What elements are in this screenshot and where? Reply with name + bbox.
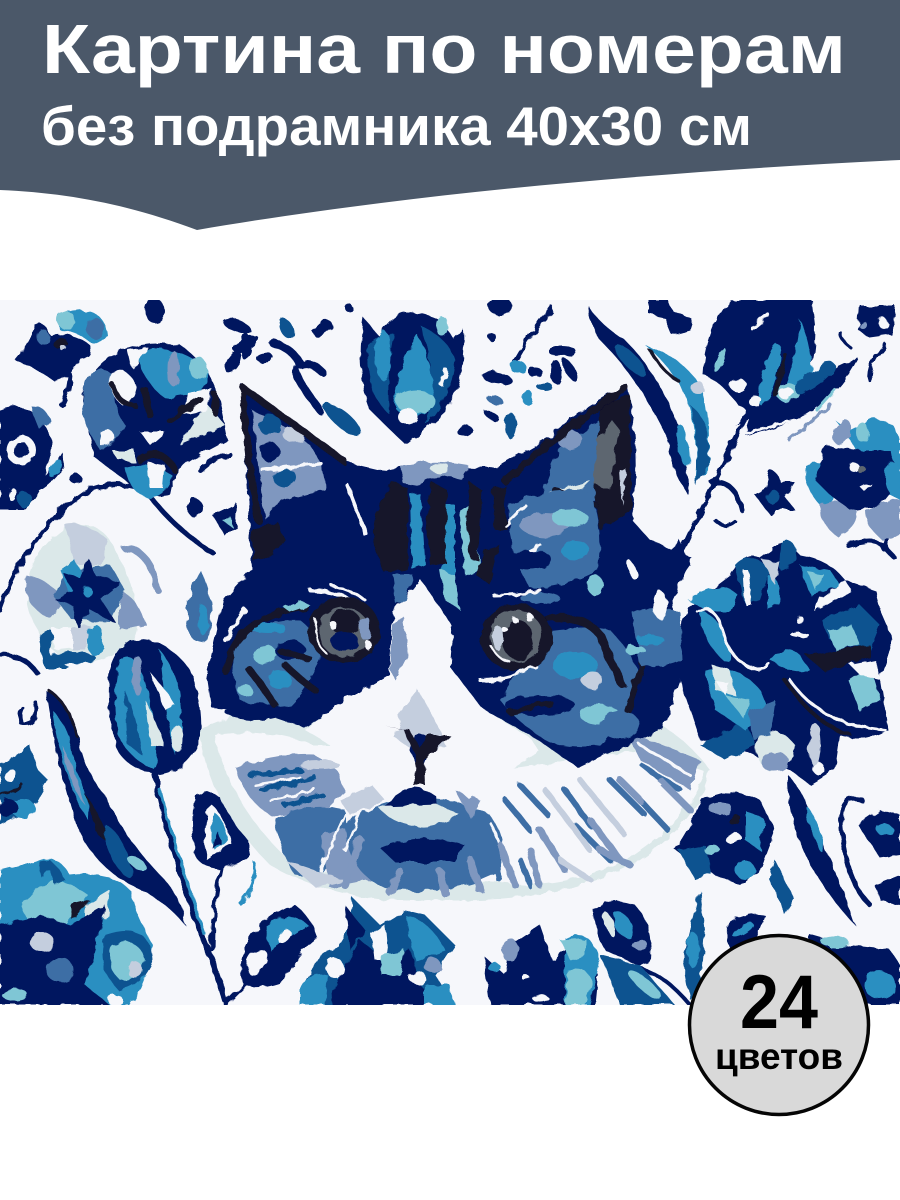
head navy [207, 384, 692, 768]
sprig: top right [345, 297, 580, 439]
badge label: цветов [715, 1036, 843, 1077]
tulip: bottom right [592, 901, 675, 1005]
marks: top right [650, 300, 895, 347]
head right ear [505, 388, 632, 530]
flower: far left ring [0, 405, 65, 510]
leaves: upper right [588, 305, 709, 495]
flower: top left small [15, 309, 107, 382]
small flower: right [755, 472, 795, 515]
tulip: upper right [703, 300, 858, 440]
header banner [0, 0, 900, 230]
tulip: top centre [361, 312, 464, 445]
sprig: top left [145, 299, 367, 442]
blaze shading [300, 615, 432, 769]
tulip bud [192, 792, 250, 868]
tulip: small lower [225, 905, 318, 1005]
nose [387, 693, 450, 785]
stems and thin lines [0, 345, 892, 1005]
flower: pale left [25, 524, 158, 668]
white blaze and muzzle [300, 580, 540, 800]
flower: far left partial [0, 745, 48, 825]
blob cluster: top of big flower [671, 538, 885, 572]
forehead stripes and light patches [347, 462, 507, 610]
leaves: lower right [683, 775, 900, 1000]
blobs: left small marks [69, 473, 237, 642]
painting: cat among blue flowers [0, 297, 900, 1005]
title: Картина по номерам [42, 10, 846, 88]
badge number: 24 [740, 960, 818, 1045]
tulip: left [108, 639, 201, 775]
leaf: lower left [45, 690, 185, 925]
right cheek markings [480, 590, 682, 747]
flower: right side [805, 417, 900, 538]
badge: 24 colours [690, 936, 868, 1114]
eye right [480, 604, 552, 670]
flower: bottom middle right [483, 925, 600, 1005]
fur streaks [215, 730, 705, 893]
left cheek markings [225, 586, 365, 720]
flower: bottom centre [300, 897, 455, 1005]
eye left [308, 597, 380, 663]
flower: bottom left [0, 857, 153, 1005]
right forehead mottling [505, 490, 641, 604]
flower: bottom right [800, 935, 900, 1005]
lower fur base [200, 690, 710, 901]
cat head [200, 384, 710, 901]
flower: large right [670, 539, 893, 785]
flower: upper left [82, 343, 230, 498]
flower: lower right small [675, 790, 775, 885]
head left ear [243, 388, 345, 562]
subtitle: без подрамника 40х30 см [41, 95, 752, 157]
